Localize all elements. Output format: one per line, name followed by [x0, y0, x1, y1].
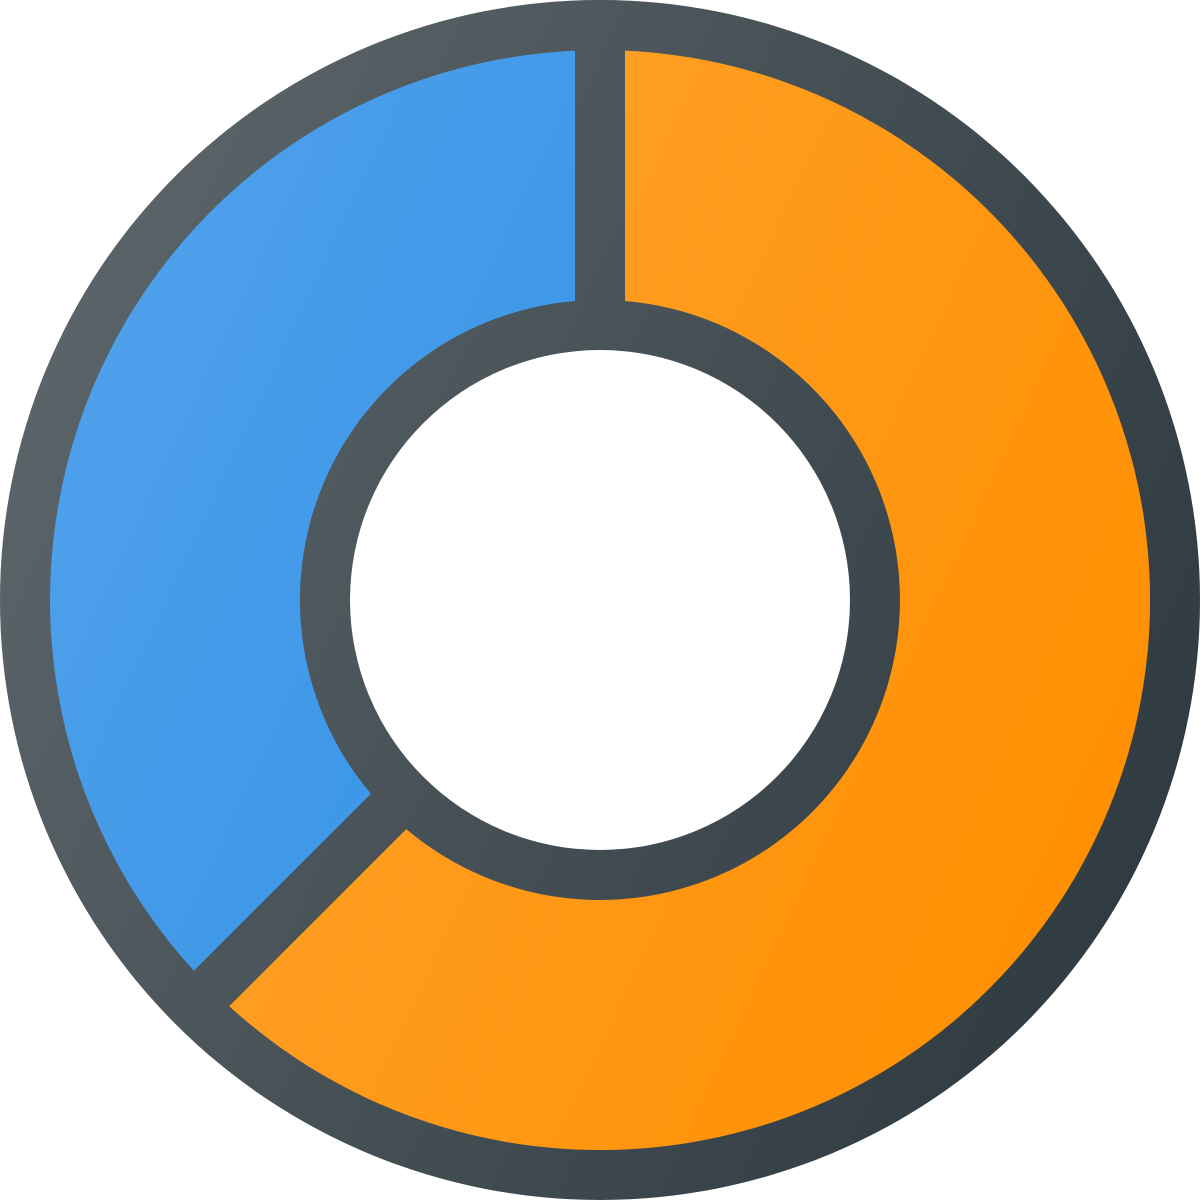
orange segment: [229, 51, 1150, 1150]
centre hole: [350, 350, 850, 850]
blue segment: [50, 51, 575, 971]
